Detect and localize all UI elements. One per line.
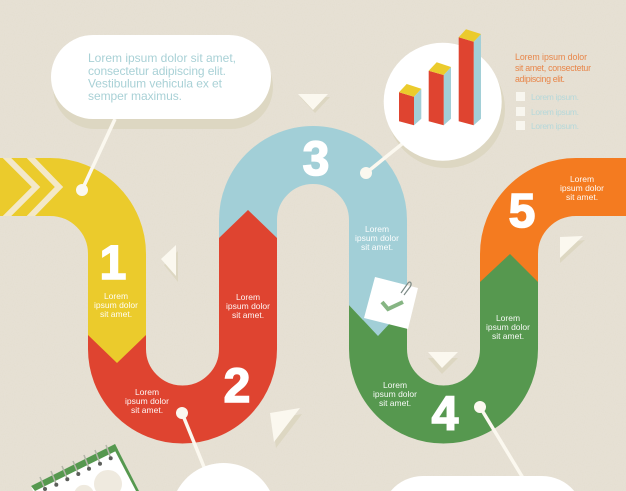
step 1 text <box>94 291 138 319</box>
callout bubble: top left: Vestibulum vehicula ex et <box>88 76 223 90</box>
step 2 text upper <box>226 292 270 320</box>
callout bubble: top left: semper maximus. <box>88 89 182 103</box>
chart description text: Lorem ipsum dolor <box>515 52 587 62</box>
step 5 text: ipsum dolor <box>560 183 604 193</box>
step 2 text upper: ipsum dolor <box>226 301 270 311</box>
step numbers <box>100 133 535 441</box>
step 4 text left <box>373 380 417 408</box>
checklist <box>516 92 579 131</box>
step numbers: 1 <box>100 237 126 290</box>
chart bubble with connector <box>360 43 505 179</box>
chart description text: adipiscing elit. <box>515 74 565 84</box>
triangle: right <box>560 236 585 263</box>
green road segment 4 <box>349 254 538 414</box>
step 4 text right <box>486 313 530 341</box>
blue road segment 3 <box>248 155 407 336</box>
chevron arrows <box>2 158 64 216</box>
step 4 text right: Lorem <box>496 313 520 323</box>
triangle: left <box>161 245 178 282</box>
callout bubble: bottom right <box>391 401 574 491</box>
step 2 text upper: Lorem <box>236 292 260 302</box>
checklist: Lorem ipsum. <box>531 107 579 117</box>
step 5 text <box>560 174 604 202</box>
notepad with spiral rings <box>31 444 139 491</box>
step 2 text lower: Lorem <box>135 387 159 397</box>
step 4 text left: Lorem <box>383 380 407 390</box>
step 2 text upper: sit amet. <box>232 310 264 320</box>
chart description text <box>515 52 591 84</box>
red road segment 2 <box>117 210 277 414</box>
step numbers: 5 <box>509 185 535 238</box>
triangle: bottom <box>270 408 302 448</box>
step 4 text right: ipsum dolor <box>486 322 530 332</box>
step 3 text <box>355 224 399 252</box>
step 5 text: Lorem <box>570 174 594 184</box>
sticky note with check mark <box>364 277 418 329</box>
checklist: Lorem ipsum. <box>531 121 579 131</box>
yellow road segment 1 <box>0 187 146 363</box>
step 3 text: ipsum dolor <box>355 233 399 243</box>
checklist: Lorem ipsum. <box>531 92 579 102</box>
step 2 text lower: ipsum dolor <box>125 396 169 406</box>
callout bubble: bottom centre <box>176 407 270 491</box>
3D bar chart <box>399 29 481 125</box>
orange road segment 5 <box>509 187 626 290</box>
step 4 text left: ipsum dolor <box>373 389 417 399</box>
callout bubble: top left <box>51 35 273 196</box>
step 5 text: sit amet. <box>566 192 598 202</box>
step 1 text: Lorem <box>104 291 128 301</box>
triangle: top <box>298 94 330 113</box>
step numbers: 2 <box>224 360 250 413</box>
step 4 text left: sit amet. <box>379 398 411 408</box>
step 1 text: sit amet. <box>100 309 132 319</box>
step 2 text lower: sit amet. <box>131 405 163 415</box>
step 3 text: Lorem <box>365 224 389 234</box>
step 1 text: ipsum dolor <box>94 300 138 310</box>
chart description text: sit amet, consectetur <box>515 63 591 73</box>
callout bubble: top left: Lorem ipsum dolor sit amet, <box>88 51 236 65</box>
step 3 text: sit amet. <box>361 242 393 252</box>
step numbers: 4 <box>432 388 459 441</box>
callout bubble: top left: consectetur adipiscing elit. <box>88 64 226 78</box>
triangle: inside green curve <box>428 352 458 374</box>
step 2 text lower <box>125 387 169 415</box>
step numbers: 3 <box>303 133 329 186</box>
step 4 text right: sit amet. <box>492 331 524 341</box>
